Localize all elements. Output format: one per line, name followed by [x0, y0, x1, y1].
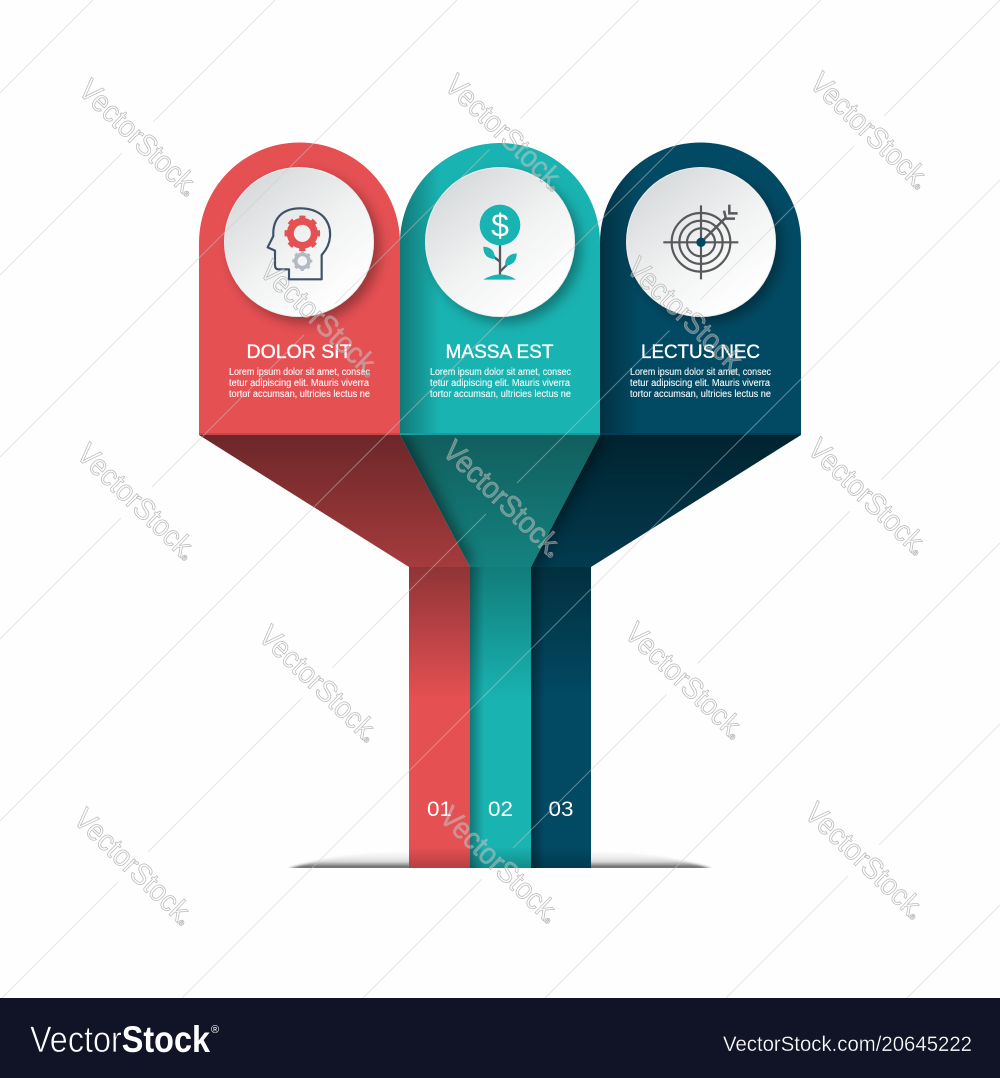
circle badge: teal panel [426, 168, 574, 316]
watermarks: VectorStock® [70, 437, 202, 567]
icon: money plant [480, 205, 520, 280]
panel: lectus nec [600, 142, 801, 435]
body text: dolor sit [229, 367, 370, 400]
watermarks: VectorStock® [252, 619, 384, 749]
body text: massa est: tetur adipiscing elit. Mauris viverra [430, 378, 570, 389]
panel: dolor sit [199, 142, 400, 435]
footer registered mark: ® [211, 1024, 219, 1036]
funnel segment: teal [396, 435, 600, 567]
watermarks: VectorStock® [618, 616, 750, 746]
heading: lectus nec: LECTUS NEC [641, 342, 760, 363]
watermarks: VectorStock® [67, 802, 199, 932]
body text: dolor sit: tortor accumsan, ultricies lectus ne [229, 389, 370, 400]
step numbers: 01 [427, 798, 452, 821]
stem: navy [531, 567, 591, 868]
step numbers: 02 [488, 798, 513, 821]
circle badge: red panel [224, 168, 374, 316]
watermarks: VectorStock® [72, 73, 204, 203]
panel: massa est [400, 143, 600, 435]
watermarks: VectorStock® [438, 68, 570, 198]
watermarks: VectorStock® [433, 800, 565, 930]
body text: lectus nec: tetur adipiscing elit. Mauris viverra [630, 378, 770, 389]
footer logo: VectorStock [30, 1019, 210, 1060]
icon: target with arrow [663, 205, 738, 279]
body text: lectus nec: tortor accumsan, ultricies lectus ne [630, 389, 771, 400]
body text: dolor sit: Lorem ipsum dolor sit amet, consec [229, 367, 370, 378]
heading: massa est: MASSA EST [446, 342, 554, 363]
body text: massa est: Lorem ipsum dolor sit amet, consec [430, 367, 571, 378]
funnel segment: navy [527, 435, 801, 567]
icon: money plant: $ [491, 207, 509, 243]
funnel [199, 435, 801, 567]
body text: lectus nec [630, 367, 771, 400]
stem: red [409, 567, 470, 868]
heading: dolor sit: DOLOR SIT [246, 342, 352, 363]
step numbers [427, 798, 574, 821]
body text: massa est [430, 367, 571, 400]
watermarks [67, 66, 935, 932]
footer image id: VectorStock.com/20645222 [723, 1033, 972, 1056]
watermarks: VectorStock® [620, 251, 752, 381]
step numbers: 03 [548, 798, 574, 821]
watermarks: VectorStock® [803, 66, 935, 196]
footer bar [0, 998, 1000, 1078]
body text: lectus nec: Lorem ipsum dolor sit amet, consec [630, 367, 771, 378]
watermarks: VectorStock® [436, 434, 568, 564]
funnel segment: red [199, 435, 470, 567]
stem: teal [470, 567, 531, 868]
stems [409, 567, 591, 868]
body text: dolor sit: tetur adipiscing elit. Mauris viverra [229, 378, 369, 389]
body text: massa est: tortor accumsan, ultricies lectus ne [430, 389, 571, 400]
watermarks: VectorStock® [801, 432, 933, 562]
icon: head with gears [268, 208, 330, 279]
watermarks: VectorStock® [253, 254, 385, 384]
watermarks: VectorStock® [798, 796, 930, 926]
circle badge: navy panel [626, 168, 776, 316]
ground shadow [288, 854, 712, 868]
